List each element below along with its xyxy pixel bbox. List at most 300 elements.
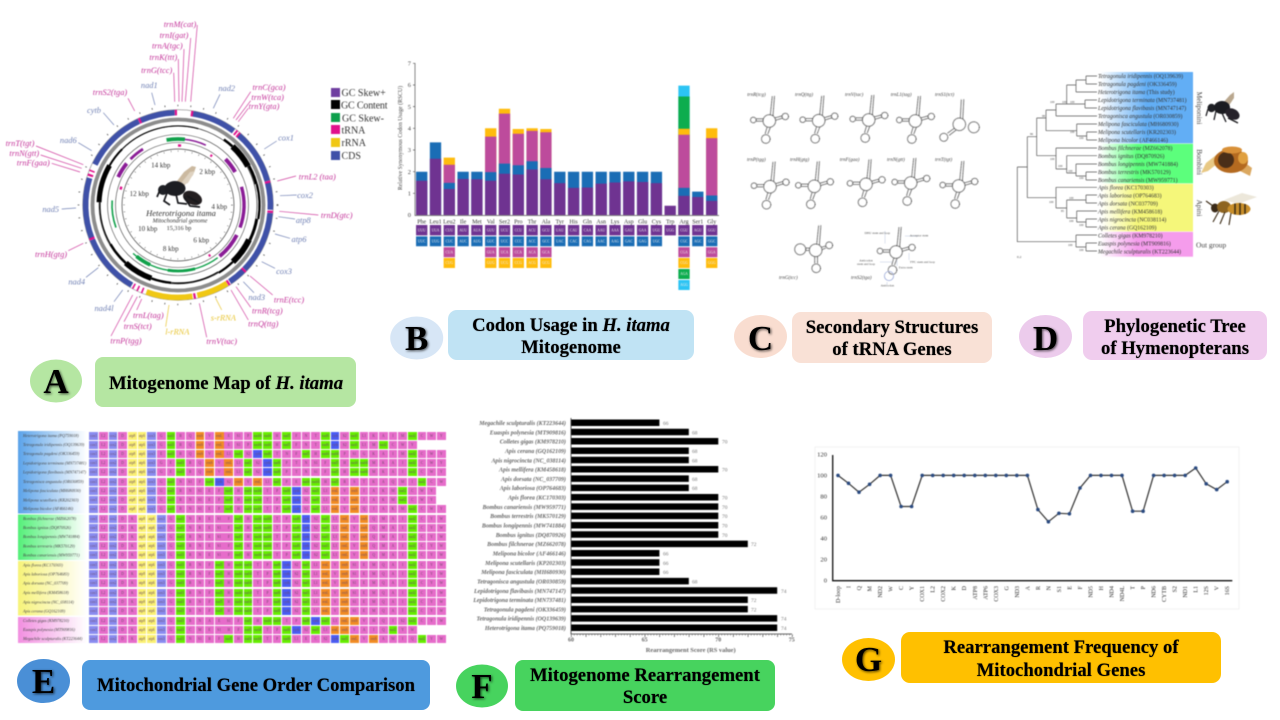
panel E: gene order grid: D	[121, 461, 124, 465]
panel E: gene order grid: P	[286, 470, 288, 474]
panel E: gene order grid: K	[131, 572, 134, 576]
panel E: gene order grid: R	[189, 544, 191, 548]
panel E: gene order grid: cytb	[284, 563, 290, 567]
panel E: gene order grid: L2	[101, 572, 105, 576]
panel E: gene order grid: S1	[198, 489, 202, 493]
support values: 100	[1069, 196, 1074, 200]
panel E: gene order grid: W	[440, 572, 443, 576]
panel E: gene order grid: E	[305, 637, 307, 641]
panel E: gene order grid: nad2	[409, 507, 416, 511]
panel E: gene order grid: Q	[199, 470, 201, 474]
panel E: gene order grid: nad3	[177, 563, 184, 567]
codon text: CGU	[680, 228, 688, 232]
value labels: 68	[692, 430, 698, 436]
clade labels	[1195, 92, 1226, 250]
panel E: gene order grid: nad2	[409, 470, 416, 474]
panel E: gene order grid: nad3	[177, 600, 184, 604]
panel E: gene order grid: G	[170, 619, 172, 623]
blue protein gene labels: nad3	[248, 293, 265, 302]
support values: 100	[1050, 100, 1055, 104]
panel E: gene order grid: nad2	[409, 553, 416, 557]
panel E: gene order grid: cox2	[109, 553, 116, 557]
panel E: gene order grid: H	[237, 637, 240, 641]
panel E: gene order grid: rrnS	[361, 526, 367, 530]
tRNA names	[747, 93, 954, 281]
panel E: gene order grid: L1	[314, 581, 318, 585]
panel E: gene order grid: nad3	[177, 628, 184, 632]
panel E: gene order grid: S1	[237, 443, 240, 447]
panel E: gene order grid: K	[382, 461, 385, 465]
panel F: rearrangement score bar chart	[472, 418, 795, 654]
panel E: gene order grid: cox3	[148, 452, 155, 456]
amino acid labels: Leu1	[429, 220, 442, 226]
panel E: gene order grid: rrnS	[342, 572, 348, 576]
panel E: gene order grid: cytb	[264, 470, 271, 474]
panel E: gene order grid: nad5	[216, 600, 223, 604]
panel E: gene order grid: nad6	[322, 434, 329, 438]
panel E: gene order grid: nad4l	[244, 572, 252, 576]
panel E: gene order grid: nad4	[254, 553, 261, 557]
panel E: gene order grid: nad5	[283, 443, 290, 447]
panel E: gene order grid: nad6	[274, 461, 281, 465]
panel E: gene order grid: cox2	[109, 498, 116, 502]
panel E: gene order grid: Q	[372, 526, 375, 530]
panel E: gene order grid: S2	[295, 572, 298, 576]
panel E: gene order grid: rrnL	[342, 544, 348, 548]
codon text: GCG	[542, 261, 550, 265]
panel E: gene order grid: I	[392, 434, 394, 438]
gene labels: ND4	[1110, 586, 1116, 598]
panel E: gene order grid: cox1	[90, 553, 97, 557]
panel E: gene order grid: cox2	[109, 581, 116, 585]
heading G	[901, 632, 1221, 683]
panel E: gene order grid: nad1	[303, 600, 310, 604]
codon text: UUC	[418, 240, 426, 244]
panel E: gene order grid: cytb	[332, 434, 338, 438]
panel E: gene order grid: nad3	[167, 480, 174, 484]
legend: GC Skew-	[342, 114, 384, 124]
support values: 100	[1068, 169, 1073, 173]
panel E: gene order grid: M	[372, 572, 375, 576]
panel E: gene order grid: I	[402, 461, 403, 465]
amino acid labels: Glu	[638, 220, 647, 226]
panel E: gene order grid: Y	[430, 619, 433, 623]
species names: Lepidotrigona flavibasis (MN747147)	[473, 588, 566, 595]
codon text: CCU	[515, 228, 522, 232]
panel E: gene order grid: T	[266, 489, 269, 493]
panel E: gene order grid: nad4	[235, 581, 242, 585]
panel E: gene order grid: cox1	[90, 526, 97, 530]
taxon names: Apis mellifera (KM458618)	[1097, 208, 1162, 216]
panel E: gene order grid: E	[208, 553, 211, 557]
heading B: Mitogenome	[521, 337, 621, 358]
species names: Tetragonula pagdeni (OK336459)	[484, 606, 566, 613]
panel E: gene order grid: nad3	[177, 535, 184, 539]
panel E: gene order grid: nad6	[283, 628, 290, 632]
panel E: gene order grid: T	[266, 498, 269, 502]
panel E: gene order grid: cytb	[293, 628, 300, 632]
support values: 100	[1058, 164, 1063, 168]
panel E: gene order grid: L1	[323, 498, 327, 502]
panel E: gene order grid: A	[392, 470, 394, 474]
clade labels: Bombini	[1195, 149, 1204, 175]
panel E: gene order grid: cytb	[293, 489, 300, 493]
gene labels: S2	[1173, 586, 1179, 592]
panel E: gene order grid: C	[421, 452, 423, 456]
panel E: gene order grid: nad4l	[244, 591, 252, 595]
panel E: gene order grid: nad4	[322, 452, 329, 456]
panel E: gene order grid: N	[199, 544, 201, 548]
panel E: gene order grid: cytb	[313, 619, 319, 623]
panel E: gene order grid: L2	[101, 544, 105, 548]
panel E: gene order grid: cytb	[284, 572, 290, 576]
panel E: gene order grid: cox2	[109, 628, 116, 632]
panel E: gene order grid: cox1	[90, 535, 97, 539]
panel E: gene order grid: D	[121, 507, 124, 511]
panel E: gene order grid: nad5	[332, 480, 339, 484]
panel E: gene order grid: cox3	[148, 507, 155, 511]
panel E: gene order grid: M	[372, 443, 375, 447]
taxon names: Apis florea (KC170303)	[1097, 184, 1154, 192]
panel E: gene order grid: Q	[189, 452, 192, 456]
panel E: gene order grid: atp6	[148, 619, 155, 623]
panel E: gene order grid: nad4l	[263, 544, 271, 548]
panel E: gene order grid: V	[353, 526, 356, 530]
panel E: gene order grid: nad2	[409, 591, 416, 595]
panel E: gene order grid: W	[440, 535, 443, 539]
codon text: GUA	[487, 250, 495, 254]
panel E: gene order grid: nad2	[380, 443, 387, 447]
panel E: gene order grid: K	[382, 470, 385, 474]
panel E: gene order grid: N	[305, 434, 307, 438]
panel E: gene order grid: E	[208, 498, 211, 502]
panel E: gene order grid: nad1	[322, 535, 329, 539]
panel E: gene order grid: M	[401, 480, 404, 484]
panel E: gene order grid: S2	[246, 452, 250, 456]
panel E: gene order grid: atp8	[139, 517, 145, 521]
panel E: gene order grid: F	[218, 637, 220, 641]
taxon names: Apis cerana (GQ162109)	[1097, 224, 1157, 232]
panel E: gene order grid: nad6	[274, 470, 281, 474]
taxon names: Megachile sculpturalis (KT223644)	[1097, 248, 1181, 256]
species names: Apis florea (KC170303)	[507, 495, 566, 502]
panel E: gene order grid: A	[382, 434, 385, 438]
panel E: gene order grid: nad2	[409, 535, 416, 539]
panel E: gene order grid: W	[440, 581, 443, 585]
support values: 100	[1050, 157, 1055, 161]
species names: Melipona scutellaris (KP202303)	[484, 560, 566, 567]
panel E: gene order grid: L2	[101, 553, 105, 557]
panel E: gene order grid: atp6	[139, 461, 145, 465]
value labels: 70	[722, 496, 728, 502]
panel E: gene order grid: L2	[101, 581, 105, 585]
gene labels: ND6	[1152, 586, 1158, 598]
gene labels	[836, 585, 1231, 603]
blue protein gene labels: nad6	[60, 136, 77, 145]
value labels: 66	[663, 561, 669, 567]
panel E: gene order grid: G	[170, 563, 172, 567]
panel E: gene order grid: D	[121, 581, 124, 585]
species names: Apis dorsata (NC_037709)	[500, 476, 566, 483]
panel E: gene order grid: Y	[430, 600, 433, 604]
gene labels: COX3	[994, 586, 1000, 602]
panel E: gene order grid: K	[131, 535, 134, 539]
panel E: gene order grid: atp8	[129, 507, 135, 511]
panel C: tRNA secondary structures	[747, 93, 979, 288]
panel E: gene order grid: C	[421, 544, 423, 548]
panel E: gene order grid: cox2	[109, 609, 116, 613]
panel E: gene order grid: rrnL	[322, 600, 329, 604]
pink tRNA gene labels: trnI(gat)	[160, 31, 189, 40]
panel E: gene order grid: F	[209, 572, 211, 576]
panel E: gene order grid: R	[179, 443, 182, 447]
panel E: gene order grid: G	[170, 553, 172, 557]
panel E: gene order grid: G	[160, 489, 163, 493]
panel E: gene order grid: cytb	[264, 461, 271, 465]
panel E: gene order grid: nad5	[216, 572, 223, 576]
panel E: gene order grid: nad6	[283, 637, 290, 641]
panel E: gene order grid: S1	[227, 619, 231, 623]
codon text: GUU	[487, 228, 495, 232]
badge B	[390, 316, 443, 360]
icon: bumblebee	[1201, 146, 1252, 176]
panel E: gene order grid: K	[372, 480, 375, 484]
panel E: gene order grid: nad1	[235, 452, 242, 456]
panel E: gene order grid: cox3	[158, 609, 165, 613]
panel E: gene order grid: T	[276, 553, 278, 557]
value labels	[663, 421, 787, 632]
panel E: gene order grid: D	[121, 498, 124, 502]
panel E: gene order grid: cytb	[332, 637, 338, 641]
panel E: gene order grid: N	[199, 553, 201, 557]
panel E: gene order grid: S1	[217, 517, 221, 521]
panel E: gene order grid: K	[131, 517, 134, 521]
badge B: B	[405, 319, 428, 358]
gene labels: L1	[1194, 586, 1200, 593]
panel E: gene order grid: nad4l	[263, 517, 271, 521]
panel E: gene order grid: cox1	[90, 628, 97, 632]
value labels: 70	[722, 468, 728, 474]
panel E: gene order grid: cox1	[90, 581, 97, 585]
taxon names: Bombus filchnerae (MZ662078)	[1098, 145, 1173, 152]
panel E: gene order grid: T	[257, 591, 259, 595]
centre labels: 2 kbp	[199, 168, 216, 176]
panel E: gene order grid: cytb	[303, 526, 309, 530]
panel E: gene order grid: E	[208, 526, 211, 530]
value labels: 72	[751, 542, 757, 548]
panel E: gene order grid: nad1	[245, 461, 252, 465]
taxon names: Heterotrigona itama (This study)	[1097, 89, 1175, 96]
panel E: gene order grid: G	[160, 434, 163, 438]
amino acid labels: Pro	[514, 220, 522, 226]
panel E: gene order grid: rrnL	[342, 535, 348, 539]
panel E: gene order grid: cox1	[90, 637, 97, 641]
panel E: gene order grid: atp6	[139, 470, 145, 474]
panel E: gene order grid: E	[218, 619, 220, 623]
panel E: gene order grid: W	[440, 480, 443, 484]
panel E: gene order grid: nad2	[409, 517, 416, 521]
panel E: gene order grid: C	[421, 470, 423, 474]
panel E: gene order grid: S1	[188, 480, 192, 484]
axes: 65	[642, 638, 648, 644]
panel E: gene order grid: C	[421, 507, 423, 511]
panel E: gene order grid: nad4	[254, 544, 261, 548]
panel E: gene order grid: S2	[401, 619, 405, 623]
panel E: gene order grid: S2	[304, 628, 308, 632]
panel E: gene order grid: nad3	[167, 452, 174, 456]
panel E: gene order grid: A	[392, 600, 394, 604]
species names: Melipona scutellaris (KR202303)	[22, 497, 79, 502]
panel E: gene order grid: cox3	[158, 553, 165, 557]
gene labels: V	[1215, 585, 1221, 590]
panel E: gene order grid: H	[228, 609, 230, 613]
panel E: gene order grid: nad6	[293, 526, 300, 530]
panel E: gene order grid: cox2	[109, 443, 116, 447]
panel E: gene order grid: P	[286, 526, 288, 530]
panel E: gene order grid: S1	[352, 591, 356, 595]
heading F	[515, 660, 775, 711]
panel E: gene order grid: cox1	[90, 544, 97, 548]
axes: 7	[408, 60, 412, 68]
panel E: gene order grid: F	[228, 553, 230, 557]
stacked bars	[422, 86, 712, 215]
blue protein gene labels: nad4l	[94, 304, 114, 313]
amino acid labels: Asp	[624, 220, 634, 226]
panel E: gene order grid: E	[363, 563, 365, 567]
gene labels: G	[1004, 585, 1010, 590]
panel E: gene order grid: M	[372, 470, 375, 474]
panel E: gene order grid: F	[218, 498, 220, 502]
panel E: gene order grid: F	[218, 507, 220, 511]
panel E: gene order grid: G	[160, 470, 163, 474]
panel E: gene order grid: K	[392, 507, 394, 511]
panel E: gene order grid: nad4	[303, 480, 310, 484]
amino acid labels: Arg	[679, 220, 689, 226]
panel E: gene order grid: F	[209, 609, 211, 613]
chart frame	[815, 447, 1239, 609]
panel E: gene order grid: G	[160, 443, 163, 447]
panel E: gene order grid: nad1	[322, 517, 329, 521]
panel E: gene order grid: P	[266, 563, 268, 567]
panel E: gene order grid: T	[295, 470, 298, 474]
support values: 100	[1070, 130, 1075, 134]
panel E: gene order grid: nad4	[254, 526, 261, 530]
panel E: gene order grid: Q	[189, 434, 192, 438]
pink tRNA gene labels	[6, 20, 353, 346]
panel E: gene order grid: cox2	[109, 535, 116, 539]
gene labels: W	[889, 586, 895, 592]
codon text: ACC	[528, 240, 536, 244]
panel E: gene order grid: S2	[314, 517, 318, 521]
panel E: gene order grid: S2	[256, 470, 260, 474]
panel E: gene order grid: P	[266, 609, 268, 613]
panel E: gene order grid: E	[160, 452, 162, 456]
panel E: gene order grid: W	[440, 591, 443, 595]
panel E: gene order grid: cytb	[255, 452, 261, 456]
panel E: gene order grid: L2	[101, 498, 105, 502]
codon text: GGA	[708, 250, 716, 254]
panel E: gene order grid: H	[247, 526, 249, 530]
codon text: ACG	[528, 261, 536, 265]
codon text: GUC	[487, 240, 495, 244]
panel E: gene order grid: cytb	[284, 581, 290, 585]
panel E: gene order grid: nad4l	[244, 581, 252, 585]
panel E: gene order grid: atp6	[139, 489, 145, 493]
panel E: gene order grid: nad3	[177, 637, 184, 641]
panel E: gene order grid: G	[170, 637, 172, 641]
panel E: gene order grid: rrnS	[342, 609, 348, 613]
panel E: gene order grid: P	[276, 489, 278, 493]
blue protein gene labels: nad4	[68, 278, 85, 286]
value labels: 68	[692, 579, 698, 585]
panel E: gene order grid: L2	[101, 470, 105, 474]
panel E: gene order grid: cox2	[109, 470, 116, 474]
panel E: gene order grid: L1	[333, 517, 337, 521]
panel E: gene order grid: F	[324, 461, 326, 465]
panel E: gene order grid: C	[411, 498, 414, 502]
gene labels: I	[846, 586, 852, 588]
taxon names: Bombus canariensis (MW959771)	[1098, 177, 1178, 184]
gene labels: COX2	[941, 586, 947, 602]
species names: Apis nigrocincta (NC_038114)	[22, 599, 74, 604]
panel E: gene order grid: atp6	[148, 609, 155, 613]
panel E: gene order grid: E	[363, 609, 365, 613]
panel E: gene order grid: nad5	[216, 591, 223, 595]
panel E: gene order grid: P	[286, 461, 288, 465]
value labels: 74	[781, 617, 787, 623]
centre labels: 12 kbp	[130, 190, 149, 198]
amino acid labels: Tyr	[556, 220, 564, 226]
panel E: gene order grid: L1	[227, 452, 231, 456]
panel E: gene order grid: I	[412, 480, 413, 484]
panel E: gene order grid: W	[430, 434, 433, 438]
panel E: gene order grid: atp6	[148, 581, 155, 585]
pink tRNA gene labels: trnL2 (taa)	[299, 172, 336, 182]
panel E: gene order grid: I	[402, 553, 403, 557]
panel E: gene order grid: nad1	[245, 470, 252, 474]
panel E: gene order grid: atp8	[129, 461, 135, 465]
panel E: gene order grid: V	[353, 553, 356, 557]
pink tRNA gene labels: trnR(tcg)	[252, 306, 283, 316]
panel E: gene order grid: E	[228, 434, 230, 438]
panel E: gene order grid: R	[189, 600, 191, 604]
panel E: gene order grid: nad6	[274, 609, 281, 613]
panel E: gene order grid: nad4	[235, 609, 242, 613]
panel E: gene order grid: nad4	[254, 517, 261, 521]
panel E: gene order grid: H	[228, 600, 230, 604]
panel E: gene order grid: cox1	[90, 434, 97, 438]
panel E: gene order grid: L1	[314, 591, 318, 595]
panel E: gene order grid: nad3	[167, 507, 174, 511]
panel E: gene order grid: I	[402, 535, 403, 539]
panel E: gene order grid: E	[208, 517, 211, 521]
codon text: CUC	[446, 240, 454, 244]
panel E: gene order grid: P	[247, 434, 249, 438]
value labels: 74	[781, 626, 787, 632]
panel E: gene order grid: rrnS	[197, 452, 203, 456]
amino acid labels: Val	[487, 220, 495, 226]
panel E: gene order grid: V	[208, 443, 211, 447]
gene labels: ND5	[1088, 586, 1094, 598]
panel E: gene order grid: nad6	[274, 591, 281, 595]
panel E: gene order grid: P	[276, 507, 278, 511]
pink tRNA gene labels: trnM(cat)	[164, 20, 196, 29]
codon text: AGC	[694, 240, 702, 244]
species names: Bombus ignitus (DQ870926)	[495, 532, 566, 539]
panel E: gene order grid: I	[402, 600, 403, 604]
panel E: gene order grid: nad4l	[244, 600, 252, 604]
panel E: gene order grid: E	[208, 535, 211, 539]
